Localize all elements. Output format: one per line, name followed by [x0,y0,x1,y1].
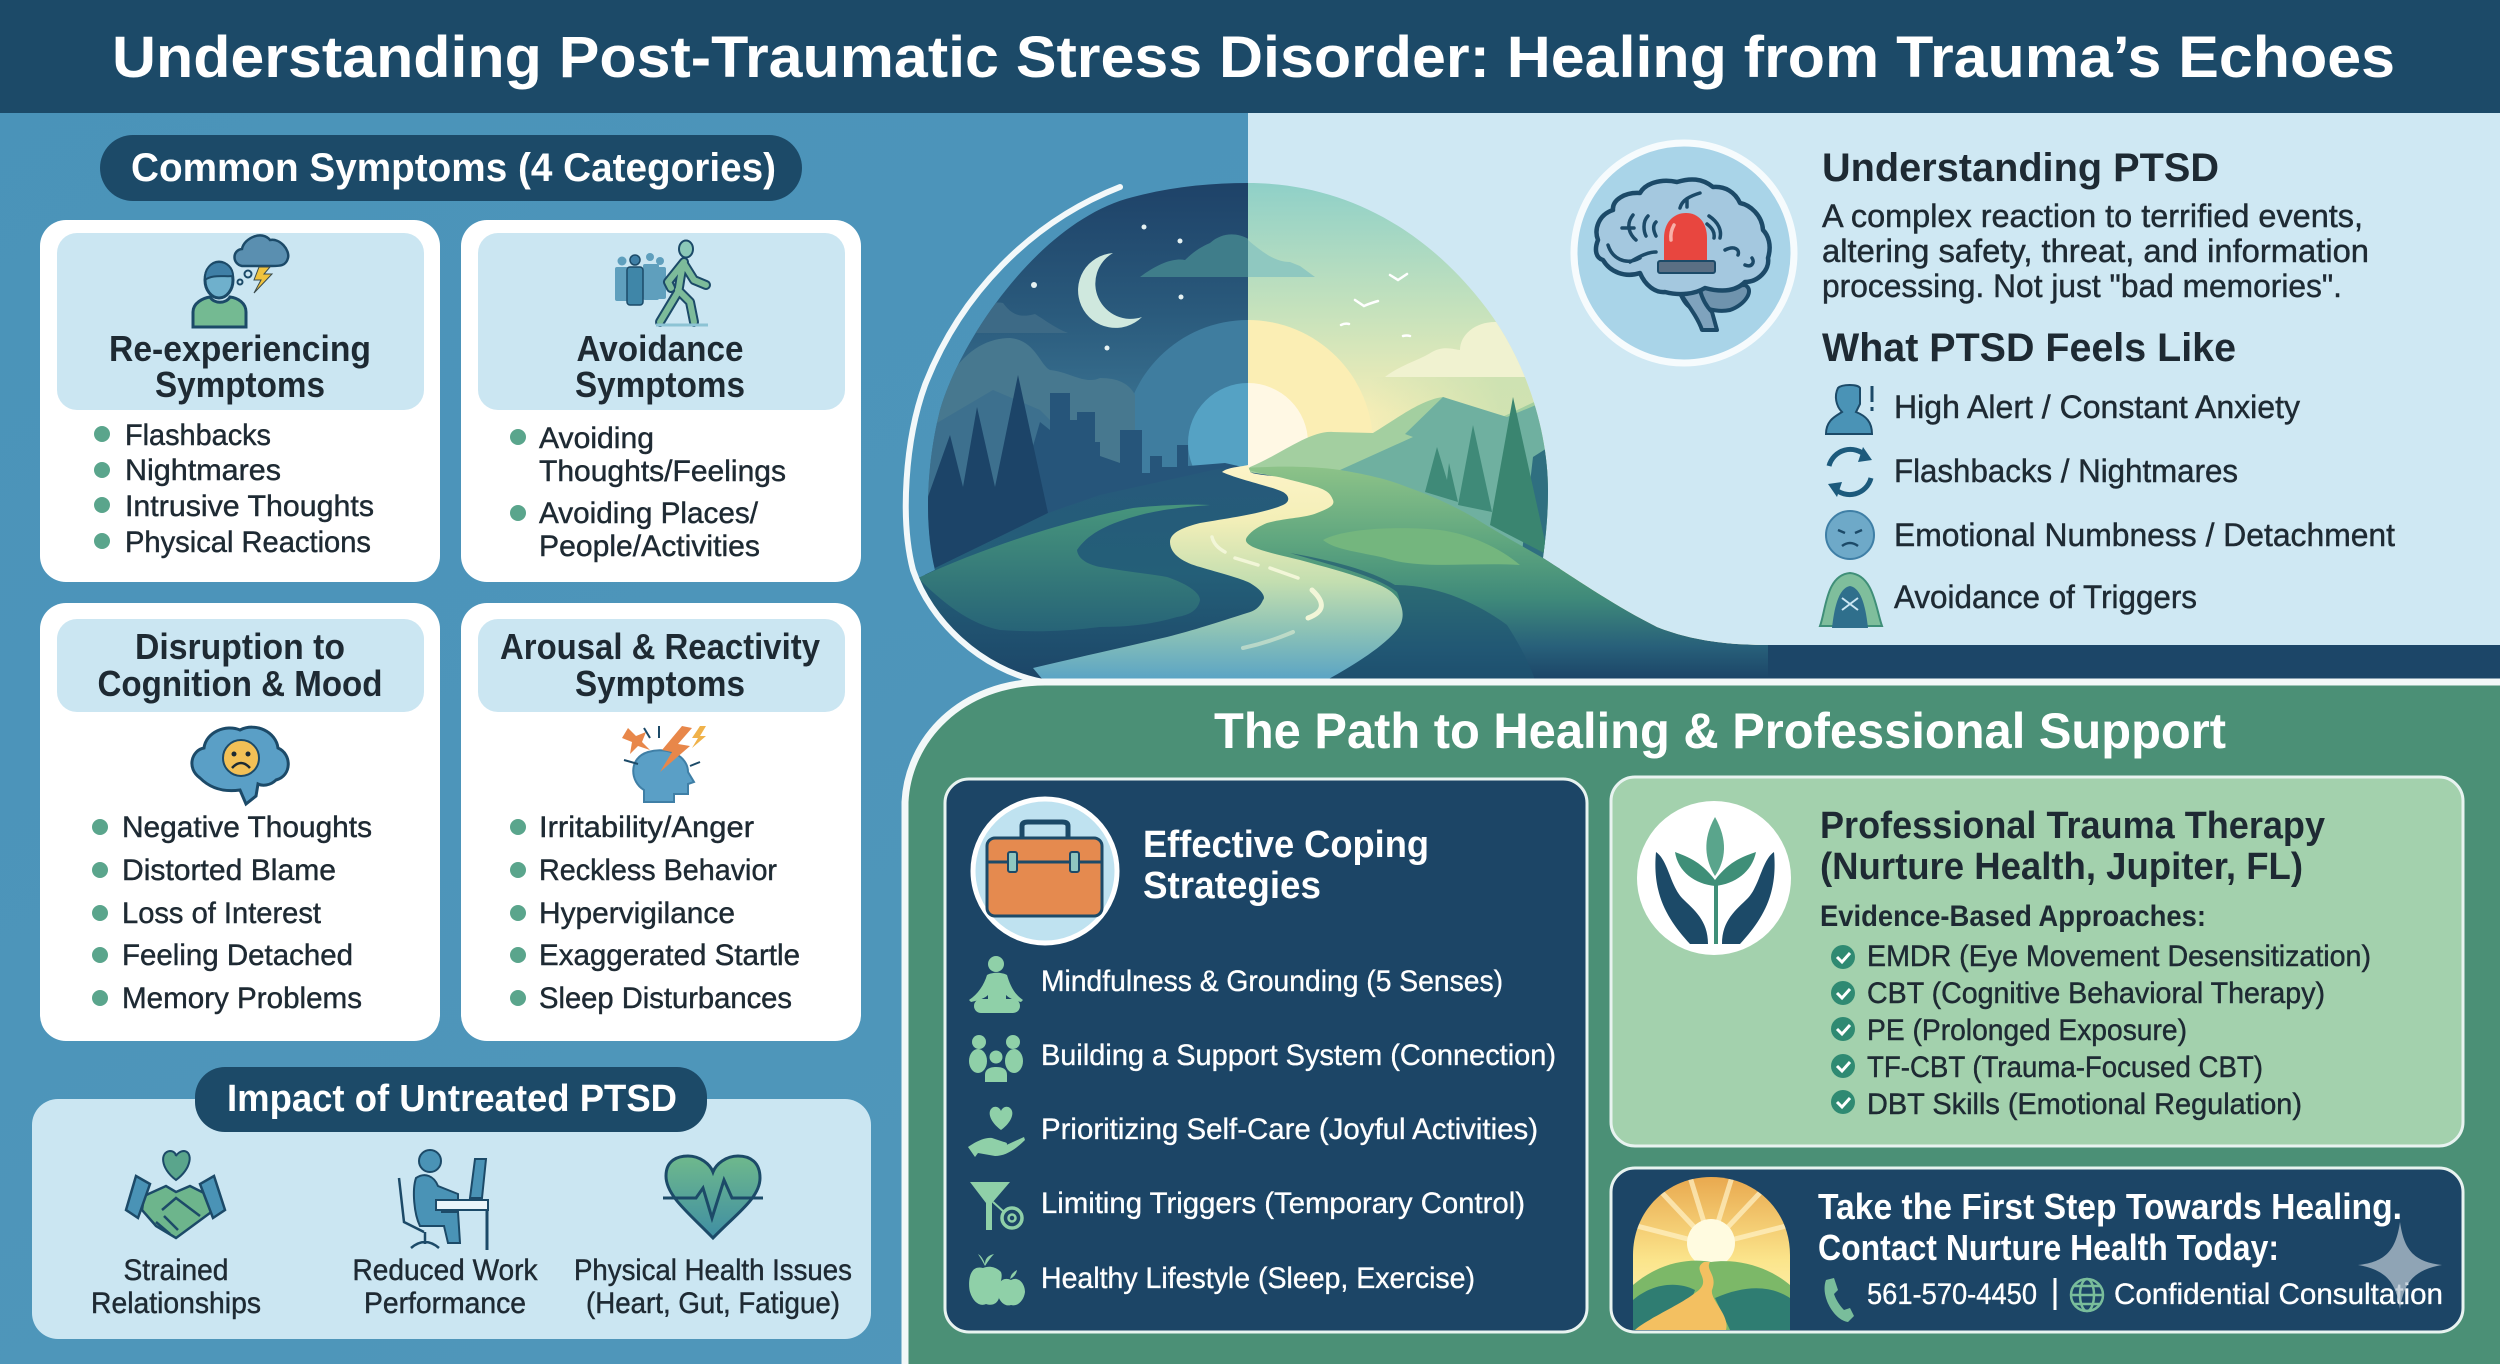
heading pill: Impact of Untreated PTSD [227,1078,677,1120]
title: Understanding Post-Traumatic Stress Disorder: Healing from Trauma’s Echoes [112,25,2395,90]
panel: call to action: Confidential Consultation [2114,1278,2443,1311]
panel: professional trauma therapy [1611,777,2463,1146]
road [1033,465,1403,680]
symptom list: Avoiding [539,422,654,455]
panel: arousal and reactivity symptoms [461,603,861,1041]
panel: what PTSD feels like: High Alert / Constant Anxiety [1894,389,2300,425]
panel: call to action [1611,1168,2463,1332]
text block: understanding PTSD [1822,146,2369,304]
icon: brain with sad face [192,727,288,804]
icon: hand with heart [968,1107,1025,1157]
icon: numb face [1826,511,1874,559]
icon: toolbox [973,799,1117,943]
heading: Re-experiencing [109,328,371,369]
white arc [906,187,1120,682]
symptom list: Sleep Disturbances [539,982,792,1015]
therapy list: CBT (Cognitive Behavioral Therapy) [1867,977,2325,1010]
heading: Avoidance [576,328,744,369]
symptom list: Physical Reactions [125,526,371,559]
icon: sparkle [2358,1222,2442,1309]
text block: understanding PTSD: Understanding PTSD [1822,146,2219,190]
panel: what PTSD feels like: Avoidance of Triggers [1894,579,2197,615]
icon: person walking away from crowd [615,240,708,325]
impact labels: (Heart, Gut, Fatigue) [586,1287,840,1320]
panel: path to healing [905,682,2500,1364]
panel: professional trauma therapy: (Nurture Health, Jupiter, FL) [1820,846,2303,888]
dark band [1300,645,2500,679]
heading pill [195,1067,707,1132]
impact labels: Relationships [91,1287,261,1320]
heading: The Path to Healing & Professional Support [1214,703,2226,759]
icon: handshake with heart [126,1151,225,1238]
heading: Disruption to [135,626,345,667]
symptom list: Distorted Blame [122,854,336,887]
therapy list: TF-CBT (Trauma-Focused CBT) [1867,1051,2263,1084]
panel: coping strategies [945,779,1587,1332]
panel: impact of untreated PTSD [32,1067,871,1339]
panel: what PTSD feels like: Flashbacks / Nightmares [1894,453,2238,489]
therapy list: DBT Skills (Emotional Regulation) [1867,1088,2302,1121]
therapy list: PE (Prolonged Exposure) [1867,1014,2187,1047]
symptom list: Reckless Behavior [539,854,777,887]
left ground [920,472,1288,678]
icon: high alert person [1826,385,1872,434]
impact labels: Reduced Work [352,1254,538,1287]
text block: understanding PTSD: processing. Not just "bad memories". [1822,268,2342,304]
icon: phone [1825,1278,1854,1322]
panel: understanding background [1248,113,2500,646]
text block: understanding PTSD: altering safety, threat, and information [1822,233,2369,269]
panel: avoidance symptoms [461,220,861,582]
symptom list: Negative Thoughts [122,811,372,844]
icon: hands with plant [1637,801,1791,955]
heading: Professional Trauma Therapy [1820,805,2325,847]
impact labels: Physical Health Issues [574,1254,852,1287]
icon: heart with pulse [663,1156,763,1238]
panel: arousal and reactivity symptoms: Symptoms [575,663,745,704]
symptoms heading pill [100,135,802,201]
symptom list: Feeling Detached [122,939,353,972]
therapy list: EMDR (Eye Movement Desensitization) [1867,940,2371,973]
symptom list: Intrusive Thoughts [125,490,374,523]
panel: disruption to cognition and mood [40,603,440,1041]
illustration: night to dawn path [900,170,1788,682]
right hill [1200,467,1768,680]
panel: coping strategies: Building a Support System (Connection) [1041,1039,1556,1072]
text: Take the First Step Towards Healing. [1818,1186,2402,1227]
text block: understanding PTSD: A complex reaction to terrified events, [1822,198,2363,234]
symptom list: Nightmares [125,454,281,487]
symptom list: Memory Problems [122,982,362,1015]
heading: Effective Coping [1143,824,1429,866]
icon: person at desk [399,1150,488,1250]
impact labels: Performance [364,1287,526,1320]
icon: globe [2071,1279,2103,1311]
symptom list [510,422,786,563]
symptom list: People/Activities [539,530,760,563]
panel: coping strategies: Prioritizing Self-Care (Joyful Activities) [1041,1113,1538,1146]
symptom list: Avoiding Places/ [539,497,759,530]
panel: what PTSD feels like [1820,326,2395,628]
symptom list: Thoughts/Feelings [539,455,786,488]
therapy list [1831,940,2371,1121]
icon: group of people [969,1035,1023,1082]
icon: brain with red alarm [1574,143,1794,363]
symptoms heading pill: Common Symptoms (4 Categories) [131,146,776,190]
heading: Arousal & Reactivity [500,626,820,667]
icon: apples [969,1254,1025,1305]
symptom list: Flashbacks [125,419,271,452]
illustration: sunrise road [1633,1177,1790,1330]
panel: what PTSD feels like: Emotional Numbness / Detachment [1894,517,2395,553]
panel: coping strategies: Strategies [1143,865,1321,907]
symptom list: Hypervigilance [539,897,735,930]
heading: What PTSD Feels Like [1822,326,2236,370]
panel: coping strategies: Healthy Lifestyle (Sleep, Exercise) [1041,1262,1475,1295]
panel: call to action: 561-570-4450 [1867,1278,2037,1311]
symptom list: Exaggerated Startle [539,939,800,972]
icon: funnel [970,1182,1022,1230]
icon: hooded figure [1820,573,1882,628]
symptom list [510,811,800,1015]
panel: re-experiencing symptoms: Symptoms [155,364,325,405]
impact labels: Strained [124,1254,228,1287]
symptom list: Irritability/Anger [539,811,754,844]
icon: head with lightning [622,726,706,802]
header title bar [0,0,2500,113]
symptom list [92,811,372,1015]
panel: coping strategies: Limiting Triggers (Temporary Control) [1041,1187,1525,1220]
icon: person with storm cloud [193,235,288,327]
panel: disruption to cognition and mood: Cognition & Mood [98,663,382,704]
icon: cycle arrows [1828,447,1872,497]
panel: coping strategies: Mindfulness & Grounding (5 Senses) [1041,965,1503,998]
icon: meditation [969,956,1023,1013]
panel: re-experiencing symptoms [40,220,440,582]
impact labels [91,1254,852,1320]
symptom list: Loss of Interest [122,897,322,930]
symptom list [94,419,374,559]
panel: professional trauma therapy: Evidence-Based Approaches: [1820,900,2206,933]
panel: call to action: Contact Nurture Health Today: [1818,1227,2279,1268]
panel: avoidance symptoms: Symptoms [575,364,745,405]
